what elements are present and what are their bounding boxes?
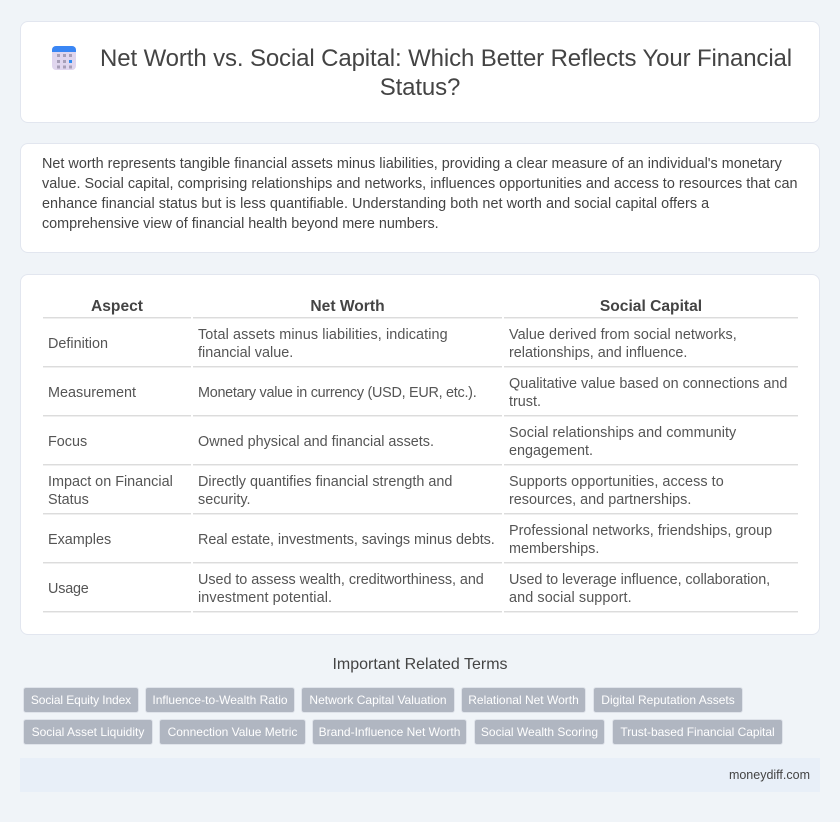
tag xyxy=(145,687,295,713)
text block: introduction: value. Social capital, comprising relationships and networks, influences opportunities and access to resources that can xyxy=(42,176,798,192)
tag: Relational Net Worth xyxy=(468,693,579,707)
comparison table: Total assets minus liabilities, indicating xyxy=(198,327,448,343)
comparison table: resources, and partnerships. xyxy=(509,492,691,508)
title: Net Worth vs. Social Capital: Which Better Reflects Your Financial xyxy=(100,45,792,72)
tag xyxy=(474,719,605,745)
comparison table: Used to leverage influence, collaboration, xyxy=(509,572,770,588)
tag: Influence-to-Wealth Ratio xyxy=(152,693,288,707)
panel: comparison table xyxy=(20,274,820,635)
tag: Network Capital Valuation xyxy=(309,693,447,707)
comparison table: investment potential. xyxy=(198,590,332,606)
comparison table: Supports opportunities, access to xyxy=(509,474,724,490)
comparison table: security. xyxy=(198,492,251,508)
row: Impact on Financial Status: Impact on Financial xyxy=(48,474,173,490)
text block: introduction: comprehensive view of financial health beyond mere numbers. xyxy=(42,216,439,232)
tag: Social Wealth Scoring xyxy=(481,725,598,739)
tag: Brand-Influence Net Worth xyxy=(319,725,460,739)
tag xyxy=(612,719,783,745)
comparison table: Social relationships and community xyxy=(509,425,736,441)
panel: introduction xyxy=(20,143,820,253)
comparison table: Owned physical and financial assets. xyxy=(198,434,434,450)
row: Usage: Usage xyxy=(48,581,89,597)
text block: introduction: Net worth represents tangible financial assets minus liabilities, providing a clear measure of an individual's monetary xyxy=(42,156,782,172)
comparison table: Qualitative value based on connections and xyxy=(509,376,787,392)
text block: introduction: enhance financial status but is less quantifiable. Understanding both net worth and social capital offers a xyxy=(42,196,709,212)
tag xyxy=(312,719,467,745)
comparison table xyxy=(43,298,798,613)
comparison table: memberships. xyxy=(509,541,599,557)
text block: introduction xyxy=(42,156,798,232)
tag xyxy=(461,687,586,713)
comparison table: Professional networks, friendships, group xyxy=(509,523,772,539)
footer xyxy=(20,758,820,792)
tag xyxy=(159,719,306,745)
tag xyxy=(23,687,139,713)
comparison table: Directly quantifies financial strength and xyxy=(198,474,452,490)
comparison table: Monetary value in currency (USD, EUR, etc.). xyxy=(198,385,476,401)
tag xyxy=(23,719,153,745)
row: Definition: Definition xyxy=(48,336,108,352)
tags: related terms xyxy=(23,687,783,745)
comparison table: relationships, and influence. xyxy=(509,345,687,361)
row: Impact on Financial Status: Status xyxy=(48,492,89,508)
comparison table: trust. xyxy=(509,394,541,410)
comparison table: financial value. xyxy=(198,345,293,361)
row: Measurement: Measurement xyxy=(48,385,136,401)
comparison table: engagement. xyxy=(509,443,593,459)
table header: Aspect: Aspect xyxy=(91,298,143,315)
title xyxy=(100,45,792,101)
tag: Digital Reputation Assets xyxy=(601,693,735,707)
tag: Social Asset Liquidity xyxy=(32,725,144,739)
comparison table: Used to assess wealth, creditworthiness, and xyxy=(198,572,484,588)
title: Status? xyxy=(380,74,460,101)
footer source text: moneydiff.com xyxy=(729,768,810,782)
tag: Social Equity Index xyxy=(31,693,131,707)
comparison table: Real estate, investments, savings minus debts. xyxy=(198,532,495,548)
panel: header xyxy=(20,21,820,123)
table header: Social Capital: Social Capital xyxy=(600,298,702,315)
comparison table: Value derived from social networks, xyxy=(509,327,737,343)
tag: Connection Value Metric xyxy=(168,725,297,739)
icon: calendar xyxy=(52,46,76,70)
table header: Net Worth: Net Worth xyxy=(310,298,385,315)
comparison table: and social support. xyxy=(509,590,632,606)
row: Examples: Examples xyxy=(48,532,111,548)
tag: Trust-based Financial Capital xyxy=(620,725,775,739)
row: Impact on Financial Status xyxy=(48,474,173,508)
heading: Important Related Terms: Important Related Terms xyxy=(332,656,508,673)
row: Focus: Focus xyxy=(48,434,87,450)
tag xyxy=(301,687,455,713)
tag xyxy=(593,687,743,713)
